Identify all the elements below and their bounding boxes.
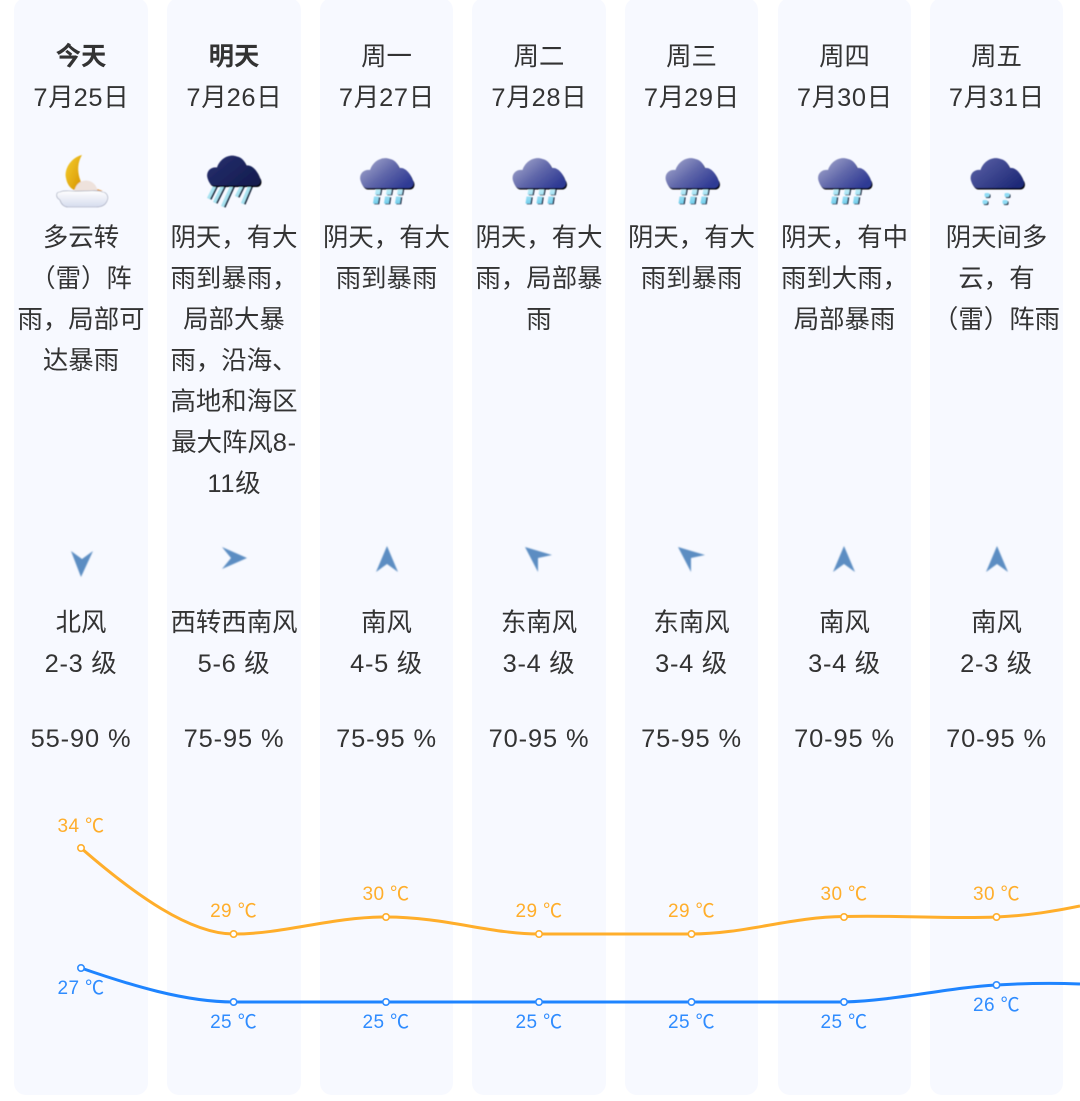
panel: 周三 7月29日	[625, 0, 758, 1095]
humidity: 70-95 %	[946, 725, 1047, 753]
wind text: 西转西南风	[171, 609, 297, 637]
weather description	[323, 224, 450, 293]
wind text: 2-3 级	[45, 650, 117, 678]
weather description: 云，有	[958, 265, 1035, 293]
icon: rain 周一	[360, 158, 414, 204]
icon: wind arrow west-southwest	[222, 547, 247, 569]
weather description	[628, 224, 755, 293]
weather description: 阴天，有大	[628, 224, 755, 252]
wind text	[171, 609, 297, 678]
wind text: 北风	[56, 609, 106, 637]
wind text: 东南风	[653, 609, 730, 637]
wind text	[501, 609, 577, 678]
panel: 周五 7月31日	[930, 0, 1063, 1095]
weather description: 雨到暴雨	[336, 265, 437, 293]
date heading	[644, 43, 739, 112]
date heading: 明天	[209, 43, 259, 71]
icon: wind arrow south	[986, 546, 1008, 572]
chart: high temperature line: 29 ℃	[210, 901, 257, 922]
humidity: 70-95 %	[794, 725, 895, 753]
icon: rain 周三	[666, 158, 720, 204]
icon: wind arrow southeast	[678, 547, 705, 572]
humidity: 75-95 %	[336, 725, 437, 753]
date heading: 周四	[819, 43, 870, 71]
weather description: 雨	[526, 306, 552, 334]
wind text: 4-5 级	[350, 650, 423, 678]
wind text: 3-4 级	[655, 650, 728, 678]
icon: wind arrow southeast	[525, 547, 552, 572]
wind text	[653, 609, 730, 678]
chart: high temperature line: 30 ℃	[973, 884, 1020, 905]
weather description: （雷）阵	[30, 265, 132, 293]
chart: low temperature line: 25 ℃	[668, 1012, 715, 1033]
wind text	[808, 609, 881, 678]
wind text: 2-3 级	[960, 650, 1033, 678]
wind text: 5-6 级	[198, 650, 270, 678]
panel: 周二 7月28日	[472, 0, 606, 1095]
panel: 明天 7月26日	[167, 0, 301, 1095]
chart: high temperature line: 29 ℃	[668, 901, 715, 922]
date heading: 周二	[514, 43, 564, 71]
weather description	[171, 224, 297, 498]
date heading: 7月26日	[186, 84, 282, 112]
weather description: 雨，局部暴	[476, 265, 602, 293]
weather description: 阴天间多	[946, 224, 1047, 252]
date heading: 7月29日	[644, 84, 739, 112]
weather description: 高地和海区	[171, 388, 297, 416]
weather description: （雷）阵雨	[933, 306, 1060, 334]
icon: showers 周五	[971, 158, 1025, 205]
weather description: 阴天，有大	[323, 224, 450, 252]
date heading: 7月27日	[339, 84, 434, 112]
weather description: 局部暴雨	[794, 306, 895, 334]
date heading	[186, 43, 282, 112]
weather description: 雨，沿海、	[171, 347, 297, 375]
humidity: 75-95 %	[184, 725, 284, 753]
date heading	[33, 42, 129, 112]
weather description	[781, 224, 908, 334]
date heading: 7月30日	[797, 84, 892, 112]
icon: crescent moon with cloud	[57, 155, 108, 207]
date heading: 7月28日	[491, 84, 587, 112]
icon: wind arrow north	[71, 551, 93, 577]
chart: high temperature line	[57, 816, 1080, 937]
date heading	[491, 43, 587, 112]
icon: heavy rain	[207, 156, 261, 207]
weather description: 局部大暴	[183, 306, 285, 334]
chart: low temperature line	[57, 965, 1080, 1033]
chart: low temperature line: 27 ℃	[57, 978, 105, 999]
wind text: 3-4 级	[808, 650, 881, 678]
humidity: 70-95 %	[489, 725, 589, 753]
date heading: 7月25日	[33, 84, 129, 112]
panel: 今天 7月25日	[14, 0, 148, 1095]
wind text	[960, 609, 1033, 678]
weather description: 达暴雨	[43, 347, 119, 375]
weather description: 11级	[207, 470, 261, 498]
date heading: 周三	[666, 43, 717, 71]
date heading	[797, 43, 892, 112]
chart: low temperature line: 25 ℃	[820, 1012, 868, 1033]
date heading: 周一	[361, 43, 412, 71]
chart: low temperature line: 25 ℃	[210, 1012, 257, 1033]
date heading: 7月31日	[949, 84, 1044, 112]
humidity: 55-90 %	[31, 725, 131, 753]
weather description	[933, 224, 1060, 334]
panel: 周四 7月30日	[778, 0, 911, 1095]
chart: low temperature line: 25 ℃	[362, 1012, 410, 1033]
weather description: 雨到暴雨，	[171, 265, 297, 293]
wind text: 3-4 级	[503, 650, 575, 678]
weather description	[18, 224, 144, 375]
weather description	[476, 224, 602, 334]
weather description: 雨，局部可	[18, 306, 144, 334]
wind text: 南风	[361, 609, 412, 637]
chart: high temperature line: 30 ℃	[362, 884, 410, 905]
chart: high temperature line: 34 ℃	[57, 816, 105, 837]
icon: wind arrow south	[376, 546, 398, 572]
chart: low temperature line: 25 ℃	[515, 1012, 563, 1033]
icon: rain 周四	[818, 158, 872, 204]
date heading	[949, 43, 1044, 112]
chart: high temperature line: 30 ℃	[820, 884, 868, 905]
weather description: 雨到大雨，	[781, 265, 908, 293]
wind text	[350, 609, 423, 678]
wind text: 南风	[971, 609, 1022, 637]
panel: 周一 7月27日	[320, 0, 453, 1095]
weather description: 雨到暴雨	[641, 265, 742, 293]
weather description: 阴天，有大	[171, 224, 297, 252]
date heading: 周五	[971, 43, 1022, 71]
weather description: 阴天，有大	[476, 224, 602, 252]
weather description: 多云转	[43, 224, 119, 252]
date heading	[339, 43, 434, 112]
date heading: 今天	[56, 43, 106, 71]
wind text	[45, 609, 117, 678]
wind text: 东南风	[501, 609, 577, 637]
weather description: 阴天，有中	[781, 224, 908, 252]
icon: rain 周二	[513, 158, 567, 204]
humidity: 75-95 %	[641, 725, 742, 753]
weather description: 最大阵风8-	[171, 429, 297, 457]
chart: high temperature line: 29 ℃	[515, 901, 563, 922]
chart: low temperature line: 26 ℃	[973, 995, 1020, 1016]
wind text: 南风	[819, 609, 870, 637]
icon: wind arrow south	[833, 546, 855, 572]
